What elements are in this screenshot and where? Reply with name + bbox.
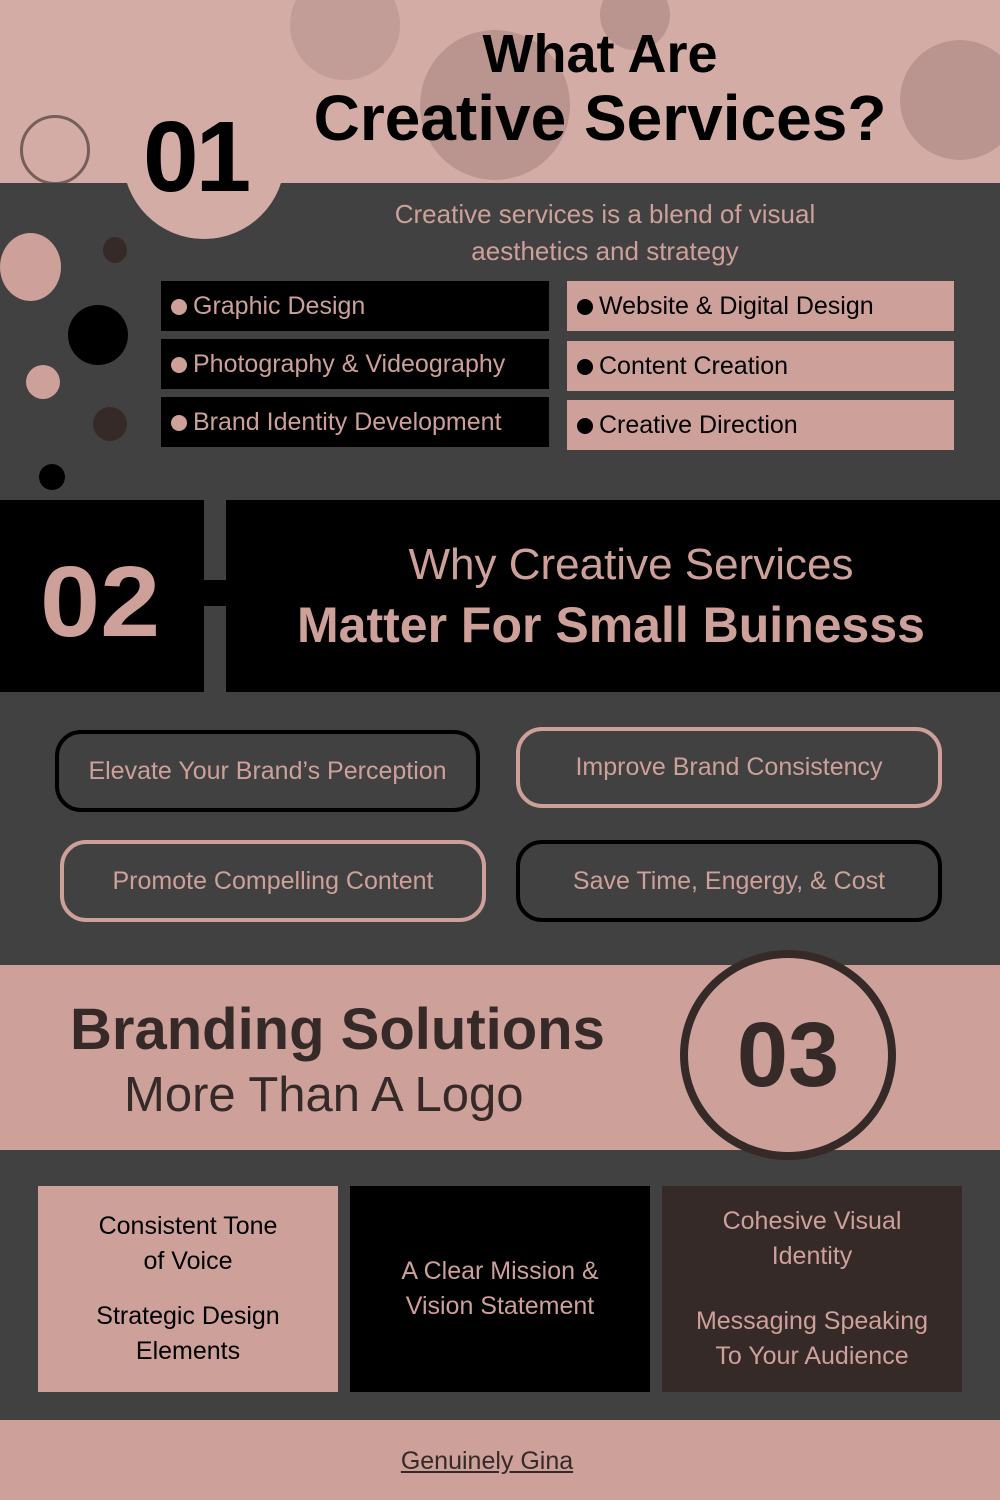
- number 02: 02: [40, 546, 160, 658]
- services list: Website & Digital Design: [599, 292, 874, 320]
- benefit pills: Promote Compelling Content: [112, 866, 434, 894]
- decorative dots: [0, 233, 128, 490]
- circle 03: 03: [737, 1004, 839, 1106]
- subtitle: Creative services is a blend of visual aesthetics and strategy: [395, 199, 815, 266]
- services list: Content Creation: [599, 352, 788, 380]
- heading 02: [297, 540, 925, 653]
- footer: [0, 1420, 1000, 1500]
- benefit pills: Elevate Your Brand’s Perception: [88, 756, 447, 784]
- title: What Are: [482, 24, 718, 84]
- heading 03: Branding Solutions: [70, 997, 605, 1062]
- box: mission: A Clear Mission &: [401, 1257, 599, 1285]
- circle behind 01: [123, 77, 285, 239]
- footer credit: Genuinely Gina: [401, 1447, 573, 1475]
- box: mission: Vision Statement: [406, 1292, 594, 1320]
- heading 03: More Than A Logo: [124, 1068, 524, 1122]
- header panel: [0, 0, 1000, 183]
- section 03 band: [0, 965, 1000, 1150]
- box: visual identity: To Your Audience: [715, 1342, 909, 1370]
- box: tone: Consistent Tone: [99, 1212, 277, 1240]
- title: [314, 24, 886, 154]
- box: visual identity: [662, 1186, 962, 1392]
- box: visual identity: Messaging Speaking: [696, 1307, 928, 1335]
- benefit pills: [55, 727, 942, 922]
- box: tone: [38, 1186, 338, 1392]
- benefit pills: Save Time, Engergy, & Cost: [573, 866, 885, 894]
- services list: Photography & Videography: [193, 350, 505, 378]
- services list: Graphic Design: [193, 292, 365, 320]
- title: Creative Services?: [314, 82, 886, 154]
- services list: Creative Direction: [599, 411, 798, 439]
- box: tone: Strategic Design: [96, 1302, 280, 1330]
- circle 03: [680, 950, 896, 1160]
- heading 02: Matter For Small Buinesss: [297, 597, 925, 653]
- number 01: 01: [143, 101, 248, 213]
- services list: [161, 281, 954, 450]
- box: tone: Elements: [136, 1337, 240, 1365]
- heading 02: Why Creative Services: [408, 540, 854, 589]
- box: tone: of Voice: [144, 1247, 232, 1275]
- section 02 banner: [0, 500, 1000, 692]
- services list: Brand Identity Development: [193, 408, 502, 436]
- box: visual identity: Identity: [772, 1242, 852, 1270]
- heading 03: [70, 997, 605, 1122]
- benefit pills: Improve Brand Consistency: [575, 753, 883, 781]
- box: visual identity: Cohesive Visual: [723, 1207, 901, 1235]
- box: mission: [350, 1186, 650, 1392]
